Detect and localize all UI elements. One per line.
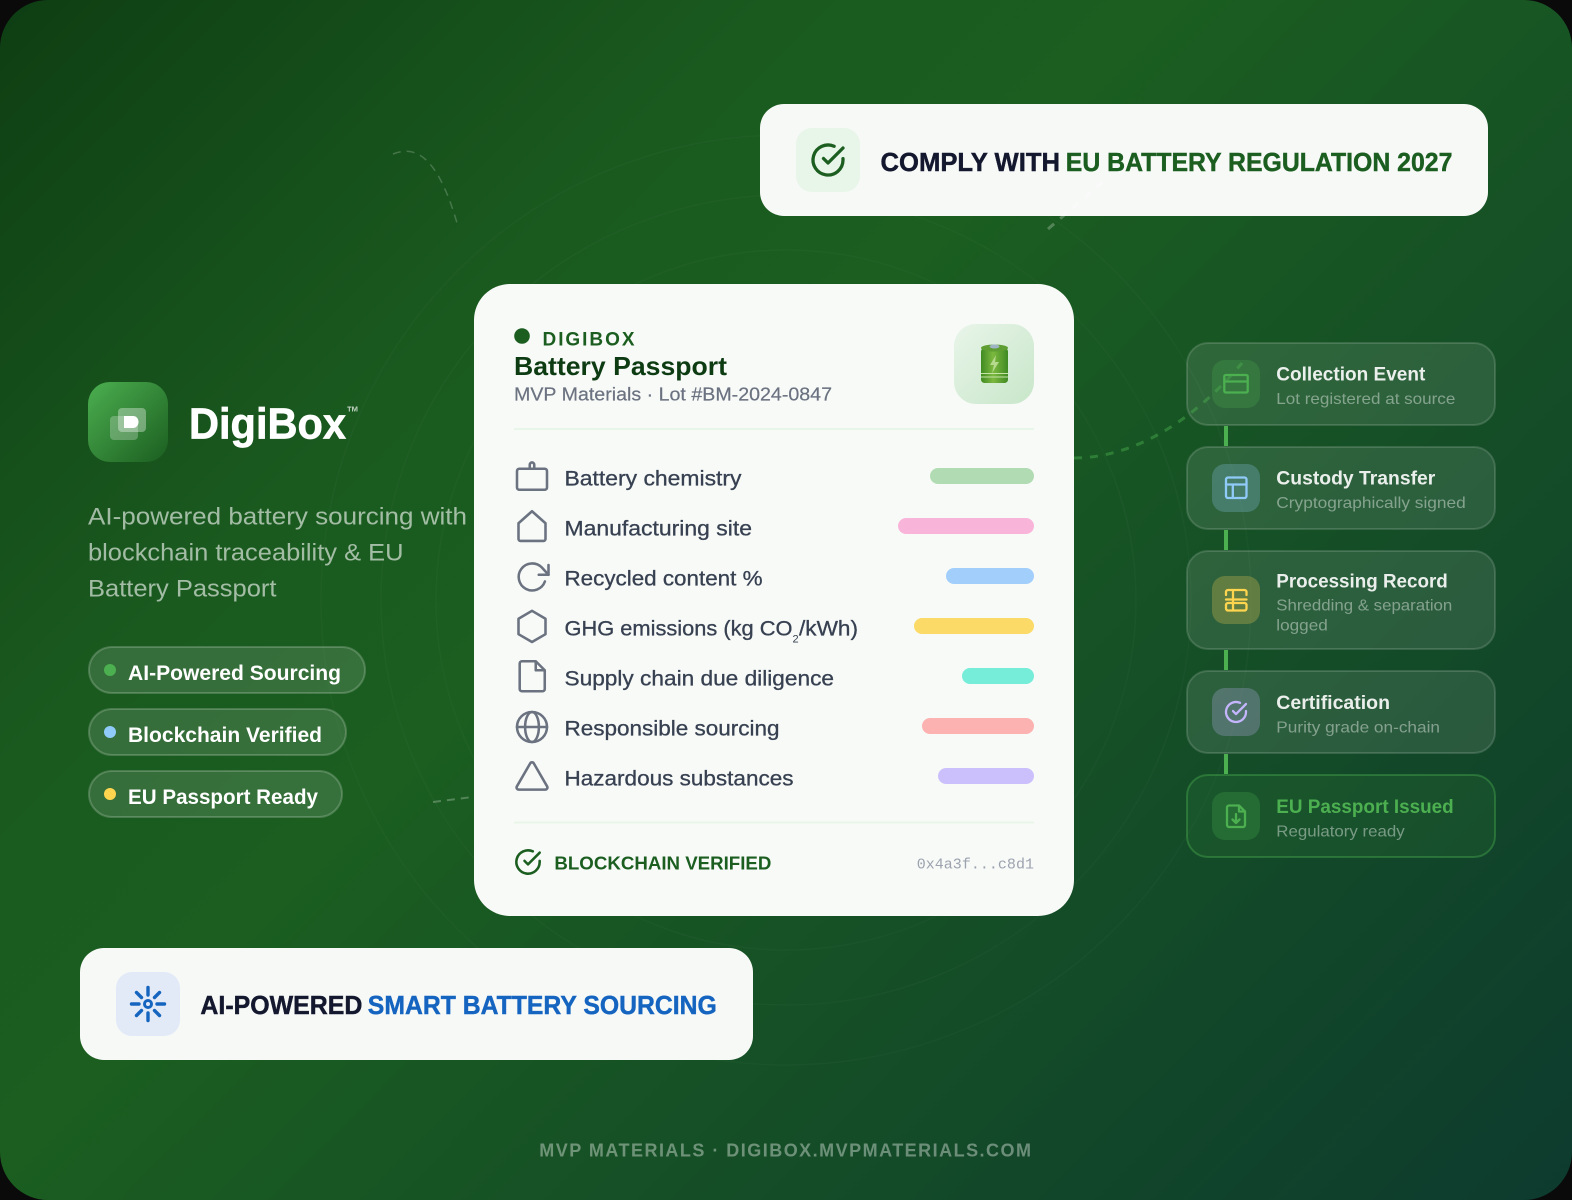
- icon: AI sun: [116, 972, 180, 1036]
- pill: Blockchain Verified: [89, 709, 346, 755]
- card header: [514, 328, 832, 404]
- step: Collection Event: Lot registered at source: [1276, 391, 1455, 408]
- card header: Battery Passport: [514, 351, 727, 381]
- pill: Blockchain Verified: Blockchain Verified: [128, 724, 322, 747]
- row: Recycled content: Recycled content %: [564, 568, 762, 591]
- banner text: COMPLY WITH: [880, 147, 1060, 177]
- pill: EU Passport Ready: [89, 771, 342, 817]
- tagline: [88, 504, 467, 602]
- step: Certification: [1187, 671, 1495, 753]
- icon: DigiBox logo: [88, 382, 168, 462]
- row: GHG emissions: GHG emissions (kg CO: [564, 618, 792, 641]
- card header: DIGIBOX: [542, 330, 635, 351]
- banner text: [200, 990, 717, 1020]
- step: Processing Record: Shredding & separation: [1276, 598, 1452, 614]
- banner text: AI-POWERED: [200, 990, 362, 1020]
- pill: AI-Powered Sourcing: AI-Powered Sourcing: [128, 662, 341, 685]
- row: Responsible sourcing: Responsible sourcing: [564, 718, 780, 741]
- brand name: ™: [346, 404, 359, 422]
- step: Processing Record: logged: [1276, 618, 1328, 634]
- pill: AI-Powered Sourcing: [89, 647, 365, 693]
- tagline: Battery Passport: [88, 576, 277, 602]
- icon: check circle: [796, 128, 860, 192]
- row: Hazardous substances: [517, 762, 1034, 791]
- feature pills: [89, 647, 365, 817]
- banner text: [880, 147, 1452, 177]
- row: Hazardous substances: Hazardous substances: [564, 768, 794, 791]
- card footer: blockchain verified: BLOCKCHAIN VERIFIED: [554, 853, 771, 873]
- row: GHG emissions: [518, 611, 1034, 646]
- card footer: blockchain verified: [516, 850, 1034, 874]
- step: Processing Record: [1187, 551, 1495, 649]
- step: Collection Event: [1187, 343, 1495, 425]
- step: EU Passport Issued: [1187, 775, 1495, 857]
- step: Certification: Certification: [1276, 693, 1390, 714]
- tagline: blockchain traceability & EU: [88, 540, 404, 566]
- banner: EU regulation: [760, 104, 1488, 216]
- step: Custody Transfer: [1187, 447, 1495, 529]
- step: Collection Event: Collection Event: [1276, 365, 1426, 386]
- row: Supply chain due diligence: Supply chain due diligence: [564, 668, 834, 691]
- banner text: SMART BATTERY SOURCING: [368, 990, 717, 1020]
- logo and brand block: [88, 382, 359, 462]
- brand name: DigiBox: [189, 400, 346, 448]
- row: Supply chain due diligence: [520, 661, 1034, 691]
- row: Manufacturing site: [518, 511, 1034, 541]
- row: GHG emissions: /kWh): [799, 618, 858, 641]
- step: Certification: Purity grade on-chain: [1276, 720, 1440, 736]
- banner: AI sourcing: [80, 948, 753, 1060]
- step: Custody Transfer: Cryptographically signed: [1276, 495, 1466, 512]
- row: Battery chemistry: [517, 462, 1034, 491]
- card header: MVP Materials · Lot #BM-2024-0847: [514, 384, 832, 404]
- tagline: AI-powered battery sourcing with: [88, 504, 467, 530]
- banner text: EU BATTERY REGULATION 2027: [1066, 147, 1452, 177]
- footer text: MVP MATERIALS · DIGIBOX.MVPMATERIALS.COM: [539, 1141, 1031, 1161]
- passport card: [474, 284, 1074, 916]
- icon: battery: [954, 324, 1034, 404]
- row: Manufacturing site: Manufacturing site: [564, 518, 752, 541]
- row: Battery chemistry: Battery chemistry: [564, 468, 742, 491]
- pill: EU Passport Ready: EU Passport Ready: [128, 786, 318, 809]
- step: EU Passport Issued: Regulatory ready: [1276, 824, 1405, 840]
- row: GHG emissions: 2: [792, 634, 799, 646]
- row: Recycled content: [519, 563, 1034, 591]
- step: EU Passport Issued: EU Passport Issued: [1276, 797, 1454, 818]
- row: Responsible sourcing: [517, 712, 1034, 742]
- card footer: blockchain verified: 0x4a3f...c8d1: [917, 857, 1034, 874]
- step: Custody Transfer: Custody Transfer: [1276, 469, 1436, 490]
- step: Processing Record: Processing Record: [1276, 572, 1448, 593]
